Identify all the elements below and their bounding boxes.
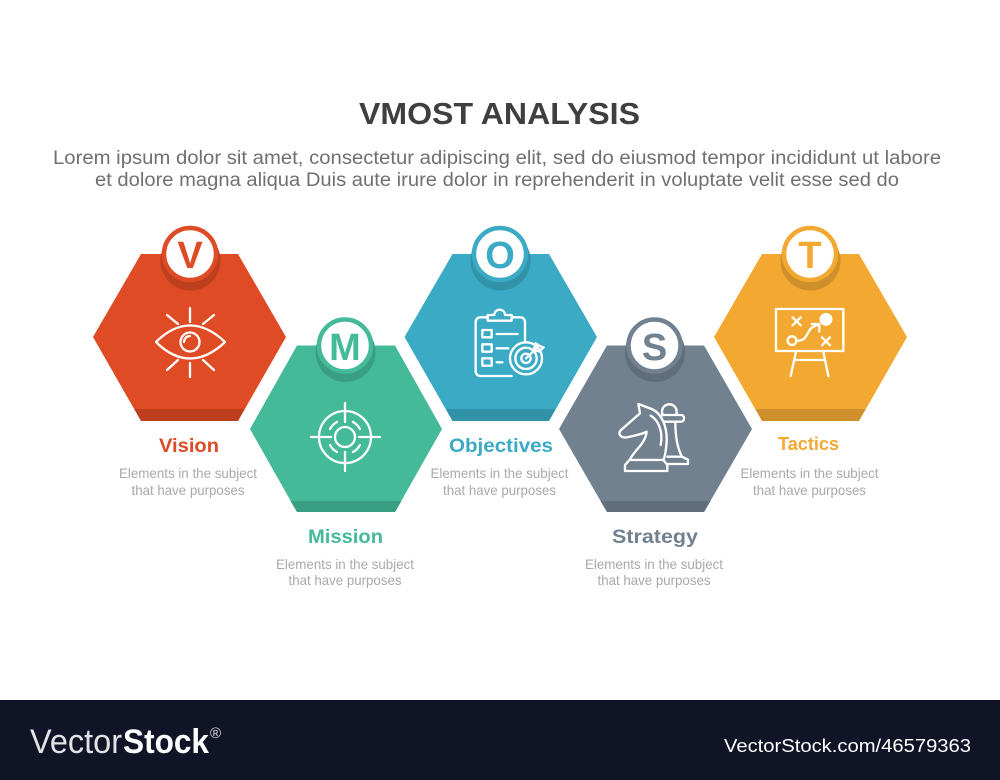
panel: Vision	[93, 228, 286, 498]
registered mark: ®	[210, 725, 221, 742]
letter badge M	[316, 320, 376, 382]
hexagon	[250, 346, 442, 512]
hexagon	[404, 254, 597, 421]
icon: eye	[156, 308, 225, 377]
letter badge O: O	[485, 235, 515, 277]
intro text	[53, 148, 941, 191]
label: Mission: Mission	[308, 527, 383, 548]
letter badge V	[160, 228, 220, 290]
description: that have purposes	[443, 482, 556, 498]
description: that have purposes	[288, 572, 402, 588]
hexagon	[714, 254, 907, 421]
image id: VectorStock.com/46579363	[724, 736, 971, 756]
label: Vision: Vision	[159, 436, 219, 457]
icon: strategy board	[776, 309, 843, 376]
icon: crosshair target	[311, 403, 380, 471]
letter badge T	[780, 228, 840, 290]
description: Elements in the subject	[276, 556, 414, 572]
description: Elements in the subject	[585, 556, 723, 572]
VectorStock logo	[30, 723, 209, 761]
description	[740, 465, 879, 498]
hexagon	[93, 254, 286, 421]
footer bar	[0, 700, 1000, 780]
intro text: et dolore magna aliqua Duis aute irure dolor in reprehenderit in voluptate velit esse sed do	[95, 170, 899, 191]
description: Elements in the subject	[119, 465, 257, 481]
description: that have purposes	[598, 572, 710, 588]
letter badge M: M	[329, 327, 361, 369]
description	[585, 556, 723, 588]
label: Strategy: Strategy	[612, 527, 698, 548]
description: Elements in the subject	[430, 465, 569, 481]
hexagon	[559, 346, 752, 512]
description: Elements in the subject	[740, 465, 879, 481]
letter badge V: V	[177, 235, 203, 277]
panel: Objectives	[404, 228, 597, 498]
letter badge T: T	[798, 235, 822, 277]
letter badge S: S	[642, 327, 667, 369]
label: Tactics: Tactics	[778, 434, 839, 454]
label: Objectives: Objectives	[449, 436, 553, 457]
description	[430, 465, 569, 498]
icon: clipboard with target	[476, 310, 544, 376]
intro text: Lorem ipsum dolor sit amet, consectetur adipiscing elit, sed do eiusmod tempor incididunt ut labore	[53, 148, 941, 169]
letter badge S	[625, 320, 685, 382]
letter badge O	[470, 228, 530, 290]
panel: Tactics	[714, 228, 907, 498]
description: that have purposes	[753, 482, 866, 498]
VectorStock logo: Vector	[30, 723, 122, 761]
description: that have purposes	[132, 482, 244, 498]
panel: Mission	[250, 320, 442, 588]
panel: Strategy	[559, 320, 752, 588]
VectorStock logo: Stock	[123, 723, 209, 761]
title: VMOST ANALYSIS	[359, 96, 640, 131]
description	[119, 465, 257, 498]
icon: chess knight and pawn	[619, 404, 688, 471]
description	[276, 556, 414, 588]
